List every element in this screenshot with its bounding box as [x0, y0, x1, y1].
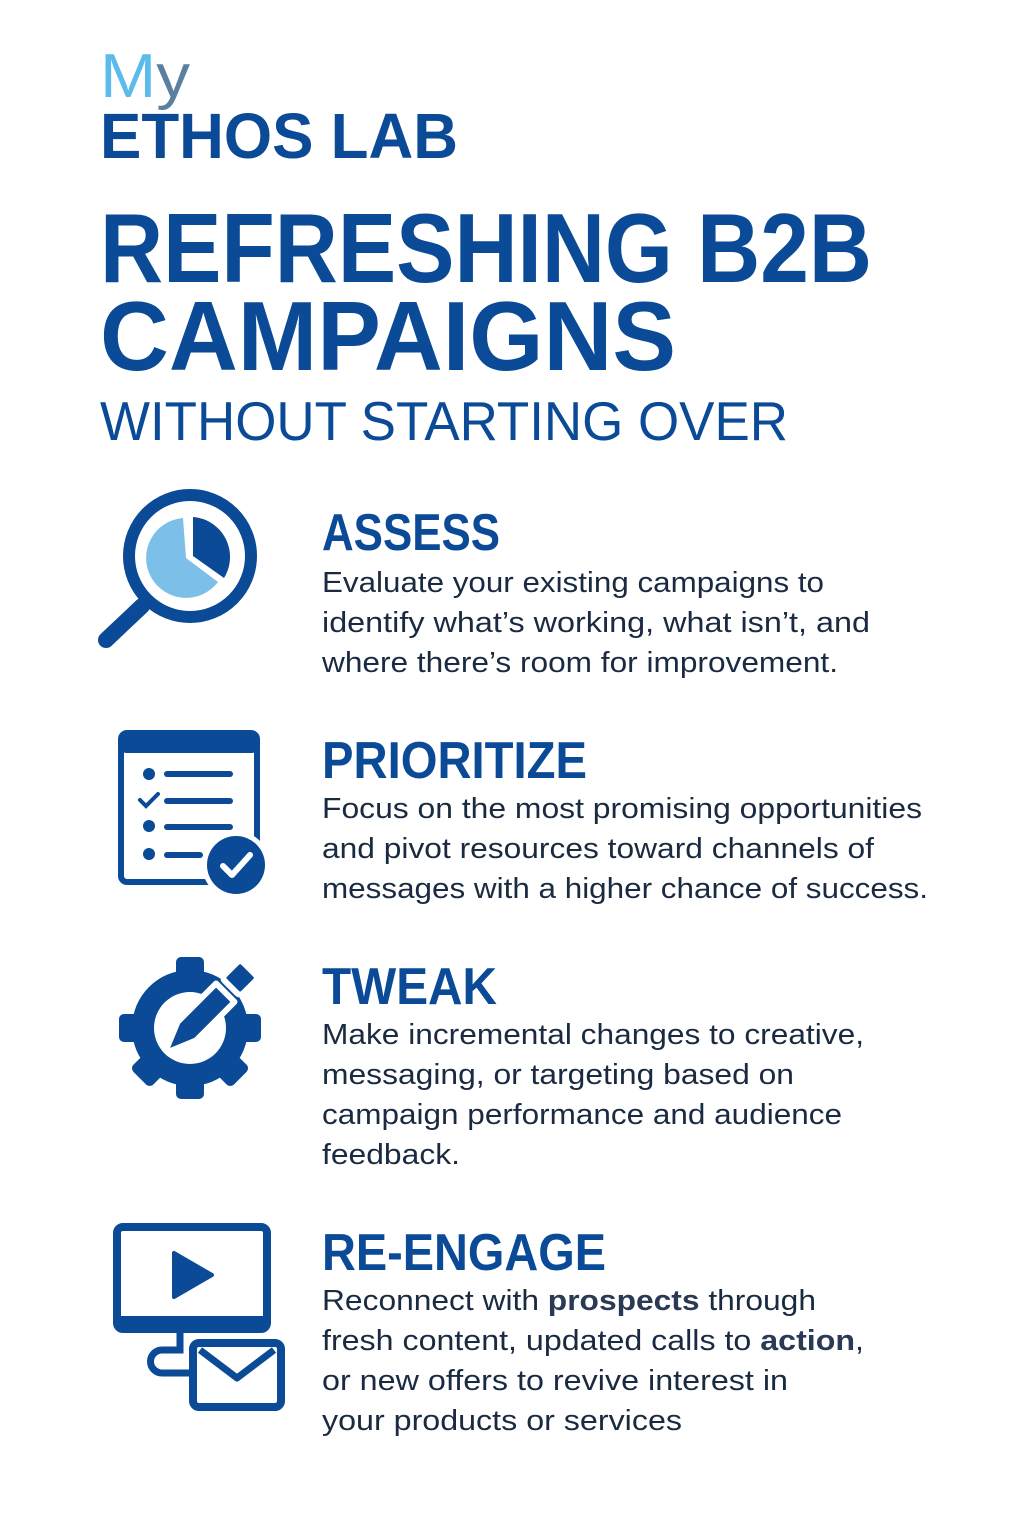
- icon: checklist: [121, 733, 270, 899]
- section: tweak: TWEAK: [322, 958, 497, 1016]
- section: re-engage: [322, 1224, 864, 1437]
- logo: [100, 42, 458, 172]
- subtitle: WITHOUT STARTING OVER: [100, 390, 788, 452]
- section: assess: ASSESS: [322, 504, 500, 562]
- section: tweak: feedback.: [322, 1139, 460, 1171]
- section: prioritize: [322, 732, 928, 905]
- section: tweak: Make incremental changes to creative,: [322, 1019, 864, 1051]
- icon: monitor with envelope: [117, 1227, 281, 1407]
- section: re-engage: your products or services: [322, 1405, 682, 1437]
- section: assess: Evaluate your existing campaigns to: [322, 567, 824, 599]
- section: prioritize: and pivot resources toward channels of: [322, 833, 875, 865]
- section: assess: where there’s room for improvement.: [321, 647, 838, 679]
- section: prioritize: PRIORITIZE: [322, 732, 587, 790]
- section: tweak: [322, 958, 864, 1171]
- section: re-engage: Reconnect with prospects through: [322, 1285, 816, 1317]
- section: prioritize: Focus on the most promising opportunities: [322, 793, 922, 825]
- icon: gear with pencil: [119, 957, 261, 1099]
- icon: magnifier with pie chart: [106, 495, 251, 640]
- section: prioritize: messages with a higher chance of success.: [322, 873, 928, 905]
- title: [100, 193, 872, 391]
- title: REFRESHING B2B: [100, 193, 872, 303]
- section: assess: [321, 504, 870, 679]
- logo: My: [100, 42, 190, 111]
- section: tweak: campaign performance and audience: [322, 1099, 842, 1131]
- section: assess: identify what’s working, what isn’t, and: [322, 607, 870, 639]
- title: CAMPAIGNS: [100, 281, 676, 391]
- section: re-engage: RE-ENGAGE: [322, 1224, 606, 1282]
- section: re-engage: fresh content, updated calls to action ,: [322, 1325, 864, 1357]
- section: tweak: messaging, or targeting based on: [322, 1059, 794, 1091]
- section: re-engage: or new offers to revive interest in: [322, 1365, 788, 1397]
- logo: ETHOS LAB: [100, 100, 458, 172]
